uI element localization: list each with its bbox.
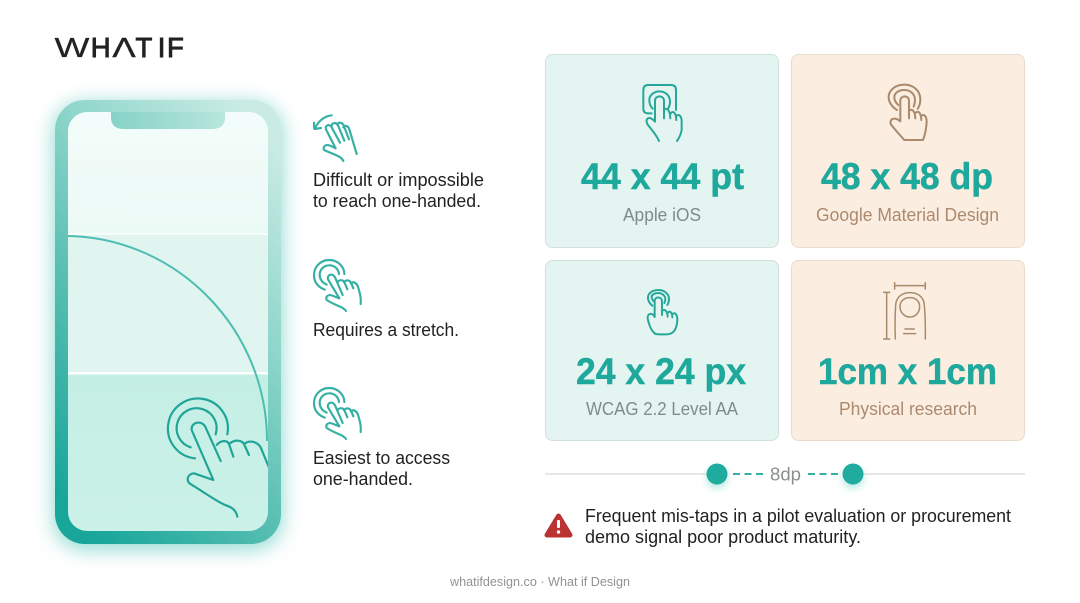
label: WCAG 2.2 Level AA	[586, 399, 738, 419]
reach arc	[68, 236, 267, 441]
label: Physical research	[839, 399, 977, 419]
text: Easiest to access	[313, 448, 450, 468]
logo: WHAT IF: T	[136, 32, 152, 63]
panel: Apple iOS	[546, 54, 778, 248]
legend: easiest to access: one-handed.	[313, 469, 413, 489]
legend: difficult to reach: to reach one-handed.	[313, 191, 481, 211]
logo: WHAT IF: F	[167, 32, 184, 63]
callout: warning	[547, 506, 1011, 547]
legend: requires a stretch	[313, 260, 459, 340]
panel: Google Material Design	[792, 54, 1024, 248]
panel: Physical research	[792, 260, 1024, 440]
icon: tap hand	[314, 388, 361, 439]
label: 8dp	[770, 464, 801, 484]
zone: stretch	[68, 234, 268, 373]
logo: WHAT IF: H	[91, 32, 111, 63]
logo: WHAT IF	[54, 32, 184, 63]
notch	[111, 112, 225, 129]
legend: easiest to access	[313, 388, 450, 489]
panel: WCAG 2.2 Level AA	[546, 260, 778, 440]
spacing diagram: 8dp	[545, 464, 1025, 488]
footer: whatifdesign.co · What if Design	[449, 575, 630, 589]
phone illustration	[54, 100, 282, 549]
value: 24 x 24 px	[576, 351, 746, 392]
logo: WHAT IF: W	[54, 32, 90, 63]
logo: WHAT IF: A	[112, 32, 136, 63]
icon: fingertip with measures	[884, 283, 925, 339]
text: Frequent mis-taps in a pilot evaluation or procurement	[585, 506, 1011, 526]
logo: WHAT IF: I	[158, 32, 165, 63]
label: Apple iOS	[623, 205, 701, 225]
value: 44 x 44 pt	[581, 156, 744, 197]
value: 48 x 48 dp	[821, 156, 993, 197]
icon: hand with arrow	[314, 115, 357, 161]
icon: warning triangle	[547, 516, 570, 535]
text: Requires a stretch.	[313, 320, 459, 340]
legend: difficult to reach	[313, 115, 484, 211]
icon: tapping hand	[168, 398, 269, 517]
icon: tap hand	[889, 85, 927, 140]
value: 1cm x 1cm	[818, 351, 997, 392]
text: Difficult or impossible	[313, 170, 484, 190]
label: Google Material Design	[816, 205, 999, 225]
zone: hard to reach	[68, 112, 268, 234]
callout: warning: demo signal poor product maturity.	[585, 527, 861, 547]
zone: easy	[68, 373, 268, 531]
icon: tap hand	[648, 290, 677, 334]
icon: tap hand	[314, 260, 361, 311]
icon: hand in square	[643, 85, 682, 141]
